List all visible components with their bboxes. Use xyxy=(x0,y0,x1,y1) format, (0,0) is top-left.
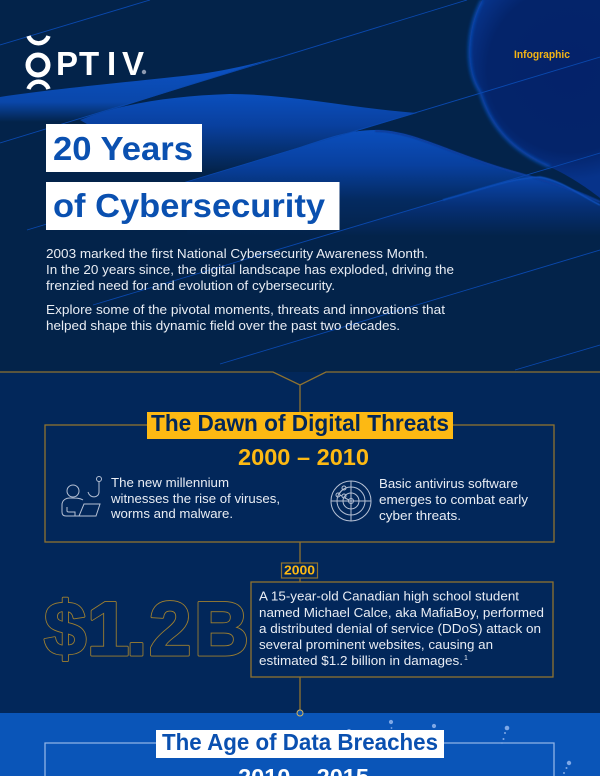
intro text: frenzied need for and evolution of cybersecurity. xyxy=(46,278,335,293)
year tag: 2000: 2000 xyxy=(284,564,315,578)
icon: person phishing at laptop xyxy=(62,476,102,516)
intro text: helped shape this dynamic field over the past two decades. xyxy=(46,318,400,333)
big stat: $1.2B: $1.2B xyxy=(44,587,249,672)
title xyxy=(46,124,340,230)
text: rise of viruses: The new millennium xyxy=(111,475,229,490)
intro text: 2003 marked the first National Cybersecurity Awareness Month. xyxy=(46,246,428,261)
logo: Optiv: PTIV xyxy=(56,45,144,82)
text: rise of viruses: worms and malware. xyxy=(110,506,233,521)
intro text: In the 20 years since, the digital landscape has exploded, driving the xyxy=(46,262,454,277)
heading: The Age of Data Breaches: The Age of Data Breaches xyxy=(162,729,438,755)
section background: dawn of digital threats xyxy=(0,372,600,713)
text: rise of viruses xyxy=(110,475,280,521)
text: antivirus xyxy=(379,476,529,523)
heading: The Dawn of Digital Threats: The Dawn of Digital Threats xyxy=(151,410,449,436)
text: antivirus: cyber threats. xyxy=(379,508,461,523)
big stat: $1.2B: $1.2B xyxy=(44,587,249,672)
callout: MafiaBoy xyxy=(251,582,553,677)
text: antivirus: emerges to combat early xyxy=(379,492,529,507)
background swooshes xyxy=(0,0,600,370)
label: Infographic: Infographic xyxy=(514,49,570,61)
logo: Optiv xyxy=(28,36,146,89)
icon: radar xyxy=(331,481,371,521)
panel: 2010-2015 xyxy=(45,729,554,776)
header background xyxy=(0,0,600,373)
callout: MafiaBoy: a distributed denial of service (DDoS) attack on xyxy=(259,621,541,636)
title: of Cybersecurity xyxy=(53,187,326,224)
callout: MafiaBoy: A 15-year-old Canadian high school student xyxy=(259,588,519,604)
intro text xyxy=(46,246,454,333)
timeline connector xyxy=(299,542,301,710)
callout: MafiaBoy: 1 xyxy=(464,655,468,662)
callout: MafiaBoy: several prominent websites, causing an xyxy=(259,637,493,652)
text: rise of viruses: witnesses the rise of viruses, xyxy=(110,491,280,506)
text: antivirus: Basic antivirus software xyxy=(379,476,518,491)
callout: MafiaBoy: named Michael Calce, aka MafiaBoy, performed xyxy=(259,605,544,620)
timeline node xyxy=(297,710,303,716)
panel: 2000-2010 xyxy=(45,410,554,542)
decorative dots xyxy=(347,720,571,774)
title: 20 Years xyxy=(53,130,193,167)
connector: header to section xyxy=(0,372,600,412)
callout: MafiaBoy: estimated $1.2 billion in damages. xyxy=(259,653,463,668)
date range: 2000 – 2010 xyxy=(238,444,369,470)
section background: age of data breaches xyxy=(0,713,600,776)
intro text: Explore some of the pivotal moments, threats and innovations that xyxy=(46,302,445,317)
